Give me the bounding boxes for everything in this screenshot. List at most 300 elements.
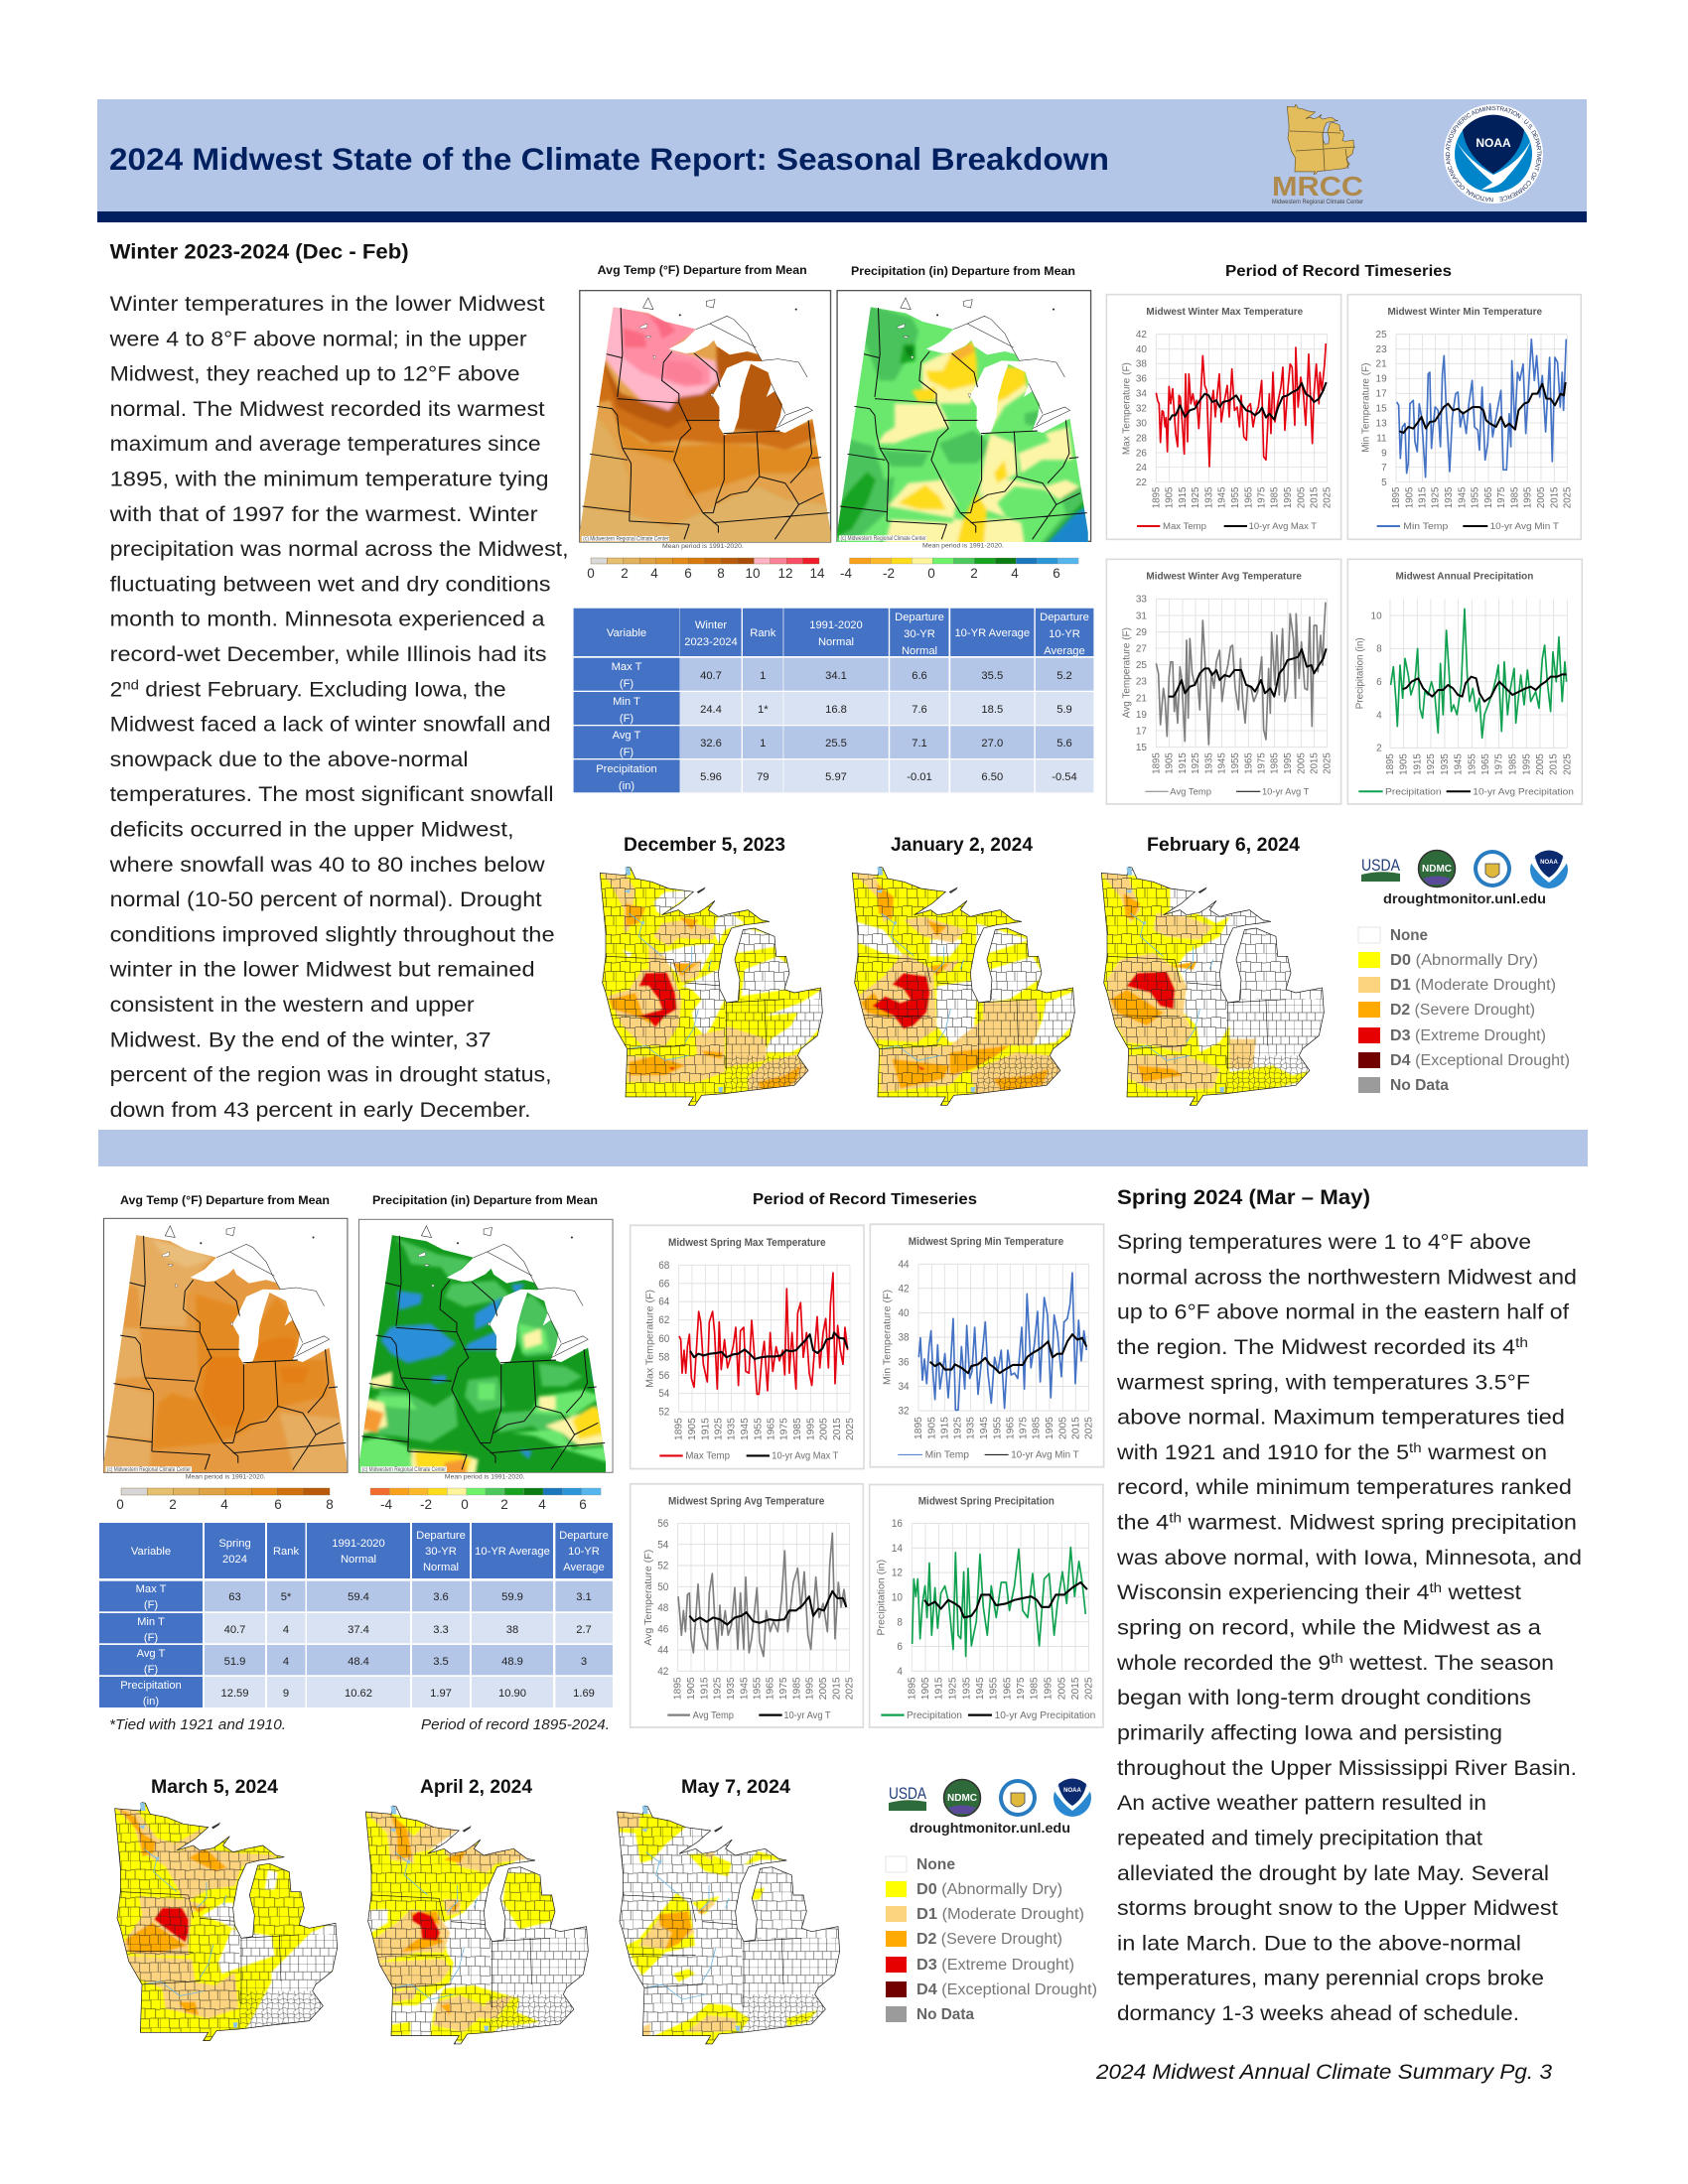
table: winter statistics: Precipitation [596, 763, 657, 775]
chart: winter average temperature: 1965 [1243, 752, 1254, 774]
table: winter statistics [574, 609, 1093, 792]
text block: spring narrative: th [1331, 1650, 1343, 1666]
table: winter statistics: -0.54 [1052, 771, 1077, 783]
colorbar: winter precipitation: 0 [927, 566, 935, 581]
text block: winter narrative: record-wet December, while Illinois had its [110, 642, 547, 666]
chart: spring max temperature: 52 [658, 1407, 670, 1419]
chart: spring average temperature: 1945 [740, 1677, 750, 1700]
colorbar: winter temperature: 14 [809, 566, 825, 581]
chart: spring precipitation: 1985 [1030, 1677, 1041, 1700]
table: winter statistics: 18.5 [981, 704, 1003, 716]
chart: spring average temperature: 1905 [686, 1677, 697, 1700]
table: spring statistics: 10-YR Average [475, 1546, 550, 1558]
date heading: February: February 6, 2024 [1147, 835, 1300, 856]
chart: spring average temperature: 10-yr Avg T [783, 1710, 831, 1721]
chart: winter precipitation: Precipitation (in) [1354, 637, 1365, 709]
chart: spring average temperature: 2025 [845, 1677, 856, 1700]
table: winter statistics: 35.5 [981, 670, 1003, 682]
date heading: January: January 2, 2024 [891, 835, 1033, 856]
chart: spring average temperature: 1995 [805, 1677, 816, 1700]
chart: spring average temperature: 2005 [818, 1677, 829, 1700]
chart: winter average temperature: 27 [1136, 643, 1147, 654]
chart: winter min temperature: 2025 [1562, 487, 1573, 508]
text block: spring narrative: Spring temperatures were 1 to 4°F above [1117, 1230, 1531, 1254]
chart: winter average temperature: 1945 [1217, 752, 1228, 774]
chart: winter min temperature: 1915 [1418, 487, 1429, 508]
chart: winter precipitation: 1925 [1426, 753, 1437, 775]
chart: spring average temperature [631, 1484, 863, 1727]
chart: spring precipitation: 1935 [962, 1677, 972, 1700]
table: winter statistics: Winter [695, 619, 727, 631]
text block: winter narrative: fluctuating between wet and dry conditions [110, 572, 551, 596]
table: spring statistics: Departure [416, 1530, 466, 1542]
chart: spring max temperature: 1905 [687, 1418, 698, 1440]
chart: spring min temperature: 34 [899, 1382, 910, 1393]
map: spring precipitation departure [353, 1219, 620, 1480]
map title: winter precipitation: Precipitation (in) Departure from Mean [851, 264, 1075, 278]
text block: winter narrative: driest February. Excluding Iowa, the [139, 677, 506, 701]
chart: winter max temperature: 1925 [1191, 487, 1201, 508]
chart: spring min temperature: Min Temp [925, 1449, 969, 1461]
chart: spring min temperature: 40 [899, 1308, 910, 1319]
icon: NDMC logo [1418, 850, 1456, 887]
chart: spring precipitation: 4 [897, 1667, 903, 1678]
drought legend: spring: D3 (Extreme Drought) [916, 1957, 1074, 1974]
table: spring statistics: Departure [559, 1530, 609, 1542]
chart: winter max temperature: 38 [1136, 359, 1147, 370]
icon: USDA logo [1361, 857, 1400, 882]
text block: winter narrative: 2 [110, 677, 122, 701]
table: spring statistics: Variable [131, 1546, 171, 1558]
chart: winter max temperature: Max Temp [1163, 521, 1206, 531]
chart: spring min temperature: 42 [899, 1284, 910, 1295]
table: spring statistics: Average [563, 1562, 605, 1573]
chart: winter max temperature: 1945 [1217, 487, 1228, 508]
map: winter precipitation departure: Mean period is 1991-2020. [922, 543, 1004, 550]
colorbar: winter temperature [587, 558, 825, 581]
chart: winter precipitation: 1935 [1440, 753, 1451, 775]
chart: spring min temperature: 10-yr Avg Min T [1011, 1449, 1079, 1461]
drought legend: winter: D3 (Extreme Drought) [1390, 1027, 1546, 1044]
chart: winter min temperature: 1985 [1509, 487, 1520, 508]
text block: winter narrative: Midwest. By the end of the winter, 37 [110, 1027, 492, 1051]
table: spring statistics: 9 [283, 1688, 289, 1700]
text block: spring narrative: primarily affecting Iowa and persisting [1117, 1721, 1502, 1745]
chart: spring average temperature: 54 [657, 1540, 669, 1551]
table: spring statistics: 2024 [222, 1554, 247, 1566]
colorbar: spring temperature: 4 [220, 1497, 228, 1512]
chart: winter average temperature: 1915 [1178, 752, 1189, 774]
chart: spring precipitation: 6 [897, 1642, 903, 1653]
table: spring statistics: Rank [273, 1546, 299, 1558]
chart: spring precipitation: Midwest Spring Precipitation [918, 1496, 1055, 1507]
text block: spring narrative: warmest on [1422, 1440, 1547, 1464]
colorbar: spring precipitation: 6 [579, 1497, 587, 1512]
text block: spring narrative: with 1921 and 1910 for the 5 [1117, 1440, 1388, 1464]
chart: spring precipitation: 1995 [1044, 1677, 1055, 1700]
chart: spring max temperature: 64 [658, 1297, 670, 1308]
text block: spring narrative: whole recorded the 9 [1117, 1651, 1317, 1675]
text block: spring narrative: th [1515, 1334, 1528, 1350]
chart: winter average temperature: Avg Temperature (F) [1121, 627, 1132, 718]
chart: spring precipitation: 1975 [1016, 1677, 1027, 1700]
chart: winter precipitation: 10 [1371, 611, 1382, 621]
chart: spring precipitation: 10-yr Avg Precipitation [995, 1710, 1095, 1721]
chart: winter max temperature: 1985 [1270, 487, 1281, 508]
map: winter precipitation departure: (c) Midwestern Regional Climate Center [841, 535, 926, 542]
chart: spring max temperature: 56 [658, 1371, 670, 1382]
text block: spring narrative: the region. The Midwest recorded its 4 [1117, 1335, 1479, 1359]
date heading: April: April 2, 2024 [420, 1777, 532, 1798]
drought legend: spring [886, 1779, 1097, 2023]
colorbar: spring temperature: 8 [326, 1497, 334, 1512]
chart: spring precipitation: 1905 [920, 1677, 931, 1700]
table: spring statistics: 4 [283, 1656, 289, 1668]
text block: spring narrative: warmest. Midwest spring precipitation [1182, 1511, 1577, 1535]
text block: winter narrative: were 4 to 8°F above normal; in the upper [109, 327, 527, 350]
table: winter statistics: 6.6 [912, 670, 927, 682]
table: winter statistics: 5.97 [825, 771, 847, 783]
table: winter statistics: Departure [1040, 612, 1089, 623]
chart: spring max temperature: Max Temp [685, 1450, 730, 1462]
chart: winter average temperature: 19 [1136, 710, 1147, 721]
map: winter precipitation departure [829, 291, 1096, 550]
table: spring statistics: (F) [144, 1599, 158, 1611]
text block: spring narrative: spring on record, while the Midwest as a [1117, 1616, 1541, 1640]
chart: winter min temperature: 5 [1381, 478, 1387, 488]
chart: spring precipitation: 1925 [948, 1677, 958, 1700]
text block: spring narrative: alleviated the drought by late May. Several [1117, 1861, 1549, 1885]
chart: spring precipitation [870, 1484, 1103, 1727]
text block: winter narrative [108, 292, 569, 1122]
map: winter temperature departure: (c) Midwestern Regional Climate Center [583, 536, 669, 543]
table: spring statistics: Normal [423, 1562, 459, 1573]
chart: spring average temperature: 42 [657, 1667, 669, 1678]
chart: winter min temperature [1347, 295, 1581, 539]
chart: winter precipitation: Midwest Annual Precipitation [1396, 571, 1533, 582]
table: spring statistics: (F) [144, 1664, 158, 1676]
chart: winter max temperature: 1975 [1256, 487, 1267, 508]
chart: winter min temperature: 25 [1376, 330, 1387, 341]
drought legend: winter: D0 (Abnormally Dry) [1390, 952, 1538, 969]
chart: winter average temperature: 21 [1136, 693, 1147, 704]
chart: spring max temperature: 1925 [714, 1418, 724, 1440]
table: winter statistics: 1* [758, 704, 769, 716]
chart: spring min temperature: 1985 [1032, 1417, 1043, 1439]
drought legend: spring: D4 (Exceptional Drought) [916, 1981, 1097, 1998]
chart: winter min temperature: 1905 [1404, 487, 1415, 508]
text block: spring narrative: wettest. The season [1343, 1651, 1554, 1675]
chart: spring min temperature: 32 [899, 1406, 910, 1418]
icon: NOAA small logo [1054, 1779, 1091, 1817]
chart: winter precipitation: 2005 [1535, 753, 1546, 775]
table: spring statistics: 40.7 [224, 1624, 245, 1636]
text block: winter narrative: maximum and average temperatures since [110, 432, 541, 456]
text block: spring narrative: th [1429, 1579, 1442, 1595]
icon: NDMC logo [943, 1779, 981, 1817]
table: spring statistics: 10.90 [498, 1688, 526, 1700]
table: spring statistics: 3.1 [576, 1591, 592, 1603]
drought legend: winter: No Data [1390, 1077, 1449, 1094]
chart: winter max temperature: 1915 [1178, 487, 1189, 508]
chart: winter max temperature: 36 [1136, 374, 1147, 385]
table: winter statistics: Avg T [613, 730, 641, 742]
drought legend: winter: None [1390, 927, 1428, 944]
chart: winter precipitation: 4 [1376, 710, 1382, 721]
map title: spring temperature: Avg Temp (°F) Departure from Mean [120, 1193, 330, 1207]
map title: winter temperature: Avg Temp (°F) Departure from Mean [598, 263, 807, 277]
table: winter statistics: Normal [902, 645, 937, 657]
chart: winter min temperature: 1975 [1496, 487, 1507, 508]
chart: winter precipitation: 2 [1376, 744, 1382, 754]
chart: spring min temperature: 1945 [979, 1417, 990, 1439]
heading: spring: Spring 2024 (Mar – May) [1117, 1186, 1370, 1209]
drought legend: spring: D0 (Abnormally Dry) [916, 1881, 1062, 1898]
table: winter statistics: 1 [760, 738, 766, 750]
table: winter statistics: Normal [818, 636, 854, 648]
chart: spring average temperature: 1965 [766, 1677, 776, 1700]
table: winter statistics: 5.6 [1056, 738, 1072, 750]
chart: spring max temperature: 54 [658, 1389, 670, 1400]
text block: winter narrative: normal (10-50 percent of normal). Drought [110, 887, 542, 911]
table: spring statistics: Normal [341, 1554, 376, 1566]
chart: winter average temperature: 2015 [1310, 752, 1321, 774]
table: winter statistics: 1 [760, 670, 766, 682]
text block: winter narrative: temperatures. The most significant snowfall [110, 782, 554, 806]
table: spring statistics: 51.9 [224, 1656, 245, 1668]
table: spring statistics: 3 [581, 1656, 587, 1668]
drought map: December 5, 2023 [600, 866, 823, 1106]
chart: winter min temperature: 1895 [1391, 487, 1402, 508]
chart: spring min temperature: 1965 [1006, 1417, 1016, 1439]
table: winter statistics: Max T [612, 661, 642, 673]
chart: spring precipitation: Precipitation [907, 1710, 962, 1721]
table: winter statistics: 6.50 [981, 771, 1003, 783]
chart: winter average temperature: 2025 [1323, 752, 1334, 774]
chart: spring max temperature: 2015 [832, 1418, 843, 1440]
chart: winter min temperature: 21 [1376, 359, 1387, 370]
chart: winter average temperature: 1975 [1256, 752, 1267, 774]
table: winter statistics: 30-YR [904, 628, 935, 640]
table: winter statistics: Departure [895, 612, 944, 623]
chart: spring max temperature: 2025 [845, 1418, 856, 1440]
table: spring statistics: Precipitation [120, 1680, 182, 1692]
chart: winter precipitation: Precipitation [1385, 787, 1442, 797]
chart: winter min temperature: Min Temp [1403, 521, 1448, 531]
map title: spring precipitation: Precipitation (in) Departure from Mean [372, 1193, 598, 1207]
chart: spring max temperature [631, 1225, 864, 1469]
chart: spring average temperature: 48 [657, 1603, 669, 1614]
chart: spring min temperature: 1975 [1019, 1417, 1030, 1439]
table: spring statistics: 1.69 [573, 1688, 595, 1700]
table: winter statistics: 32.6 [700, 738, 722, 750]
table: spring statistics: Min T [137, 1616, 165, 1628]
text block: spring narrative: temperatures, many perennial crops broke [1117, 1967, 1544, 1990]
text block: winter narrative: deficits occurred in the upper Midwest, [110, 818, 514, 842]
chart: spring precipitation: 1915 [934, 1677, 945, 1700]
table: winter statistics: 5.9 [1056, 704, 1072, 716]
icon: Department of Commerce seal [999, 1779, 1037, 1817]
chart: winter average temperature: 23 [1136, 677, 1147, 688]
table: winter statistics: Variable [607, 627, 646, 639]
chart: winter max temperature: 1965 [1243, 487, 1254, 508]
text block: spring narrative: wettest [1442, 1580, 1521, 1604]
chart: winter max temperature [1106, 295, 1341, 539]
table: winter statistics: (in) [619, 780, 634, 792]
chart: winter max temperature: 22 [1136, 478, 1147, 488]
table: winter statistics: Min T [613, 696, 640, 708]
chart: winter precipitation: 10-yr Avg Precipitation [1473, 787, 1574, 797]
table: spring statistics: 2.7 [576, 1624, 592, 1636]
table: winter statistics: 2023-2024 [684, 636, 738, 648]
chart: winter precipitation: 1995 [1521, 753, 1532, 775]
chart: spring min temperature: 38 [899, 1332, 910, 1344]
chart: winter max temperature: 2025 [1323, 487, 1334, 508]
chart: winter min temperature: Min Temperature (F) [1360, 363, 1371, 453]
chart: spring average temperature: 1915 [700, 1677, 710, 1700]
table: winter statistics: Rank [750, 627, 776, 639]
chart: spring precipitation: 1895 [908, 1677, 917, 1700]
text block: spring narrative: the 4 [1117, 1511, 1165, 1535]
colorbar: spring precipitation: 4 [538, 1497, 546, 1512]
chart: spring min temperature: 1925 [953, 1417, 964, 1439]
chart: spring average temperature: 56 [657, 1519, 669, 1530]
chart: winter min temperature: 2015 [1549, 487, 1560, 508]
chart: winter precipitation: 1985 [1507, 753, 1518, 775]
text block: winter narrative: snowpack due to the above-normal [110, 748, 469, 771]
map: spring precipitation departure: (c) Midwestern Regional Climate Center [362, 1466, 446, 1473]
chart: spring precipitation: 2015 [1070, 1677, 1081, 1700]
icon: NOAA logo: NOAA [1476, 136, 1511, 150]
text block: winter narrative: month to month. Minnesota experienced a [110, 608, 545, 631]
text block: spring narrative: throughout the Upper Mississippi River Basin. [1117, 1756, 1577, 1780]
table: winter statistics: 34.1 [825, 670, 847, 682]
chart: spring average temperature: 1955 [753, 1677, 763, 1700]
chart: winter max temperature: 34 [1136, 389, 1147, 400]
chart: spring average temperature: 52 [657, 1561, 669, 1572]
icon: Department of Commerce seal [1474, 850, 1511, 887]
table: winter statistics: Average [1044, 645, 1085, 657]
chart: spring max temperature: 1965 [767, 1418, 777, 1440]
drought legend: winter: D1 (Moderate Drought) [1390, 977, 1556, 994]
map: spring precipitation departure: Mean period is 1991-2020. [445, 1473, 525, 1480]
chart: winter min temperature: 13 [1376, 418, 1387, 429]
chart: spring average temperature: Avg Temp [693, 1710, 734, 1721]
chart: spring min temperature: 1915 [940, 1417, 950, 1439]
colorbar: winter temperature: 8 [717, 566, 725, 581]
map: winter temperature departure [573, 291, 836, 550]
table: spring statistics: 38 [506, 1624, 518, 1636]
text block: winter narrative: Midwest faced a lack of winter snowfall and [110, 713, 551, 737]
heading: winter: Winter 2023-2024 (Dec - Feb) [110, 240, 409, 264]
icon: MRCC logo: MRCC [1272, 171, 1363, 202]
table: spring statistics: 12.59 [220, 1688, 248, 1700]
text block: spring narrative: th [1169, 1510, 1182, 1526]
table: spring statistics: 4 [283, 1624, 289, 1636]
table: spring statistics: 3.5 [433, 1656, 449, 1668]
text block: spring narrative: above normal. Maximum temperatures tied [1117, 1406, 1565, 1430]
chart: spring max temperature: 1895 [674, 1418, 685, 1440]
header banner [97, 99, 1587, 222]
table: spring statistics: 10-YR [568, 1546, 600, 1558]
icon: USDA logo: USDA [1361, 857, 1400, 875]
icon: NOAA small logo [1530, 850, 1568, 888]
chart: spring average temperature: Midwest Spring Avg Temperature [668, 1496, 825, 1507]
drought map: April 2, 2024 [365, 1805, 589, 2045]
table: winter statistics: 16.8 [825, 704, 847, 716]
chart: winter precipitation: 2025 [1562, 753, 1573, 775]
chart: spring precipitation: 16 [892, 1519, 903, 1530]
table: spring statistics: 3.3 [433, 1624, 449, 1636]
text block: spring narrative: record, while minimum temperatures ranked [1117, 1475, 1572, 1499]
chart: winter average temperature: 1985 [1270, 752, 1281, 774]
chart: spring max temperature: 2005 [819, 1418, 830, 1440]
chart: spring average temperature: 2015 [832, 1677, 842, 1700]
icon: NOAA logo: NATIONAL OCEANIC AND ATMOSPHERIC ADMINISTRATION · U.S. DEPARTMENT OF COMMERCE [1446, 105, 1541, 203]
table: winter statistics: 7.6 [912, 704, 927, 716]
chart: spring min temperature: 36 [899, 1357, 910, 1368]
text block: spring narrative [1116, 1230, 1582, 2025]
icon: USDA logo [889, 1785, 926, 1811]
table: spring statistics: Spring [218, 1538, 251, 1550]
chart: winter min temperature: 11 [1376, 433, 1387, 444]
chart: spring precipitation: 1945 [975, 1677, 986, 1700]
icon: NDMC logo: NDMC [1422, 864, 1452, 875]
chart: spring max temperature: 1915 [701, 1418, 711, 1440]
table: spring statistics: 5* [281, 1591, 292, 1603]
drought map: May 7, 2024 [617, 1805, 840, 2045]
table footnote: period of record: Period of record 1895-2024. [421, 1717, 610, 1733]
chart: spring average temperature: 44 [657, 1645, 669, 1657]
chart: spring max temperature: 58 [658, 1352, 670, 1363]
chart: winter min temperature: 17 [1376, 389, 1387, 400]
chart: winter precipitation: 6 [1376, 677, 1382, 688]
chart: winter max temperature: 1905 [1165, 487, 1176, 508]
chart: winter max temperature: 32 [1136, 404, 1147, 415]
text block: spring narrative: th [1409, 1439, 1422, 1455]
chart: spring average temperature: Avg Temperature (F) [643, 1550, 654, 1646]
table: winter statistics: 25.5 [825, 738, 847, 750]
table: spring statistics: Max T [136, 1583, 167, 1595]
text block: winter narrative: down from 43 percent in early December. [110, 1098, 531, 1122]
colorbar: spring precipitation: 2 [500, 1497, 508, 1512]
chart: winter average temperature: 10-yr Avg T [1262, 787, 1310, 797]
chart: spring average temperature: 46 [657, 1624, 669, 1635]
chart: winter min temperature: 1995 [1523, 487, 1534, 508]
chart: winter average temperature: 25 [1136, 660, 1147, 671]
chart: winter precipitation [1347, 559, 1582, 804]
chart: winter average temperature: Avg Temp [1170, 787, 1211, 797]
text block: winter narrative: 1895, with the minimum temperature tying [110, 467, 549, 490]
table: winter statistics: 10-YR Average [954, 627, 1030, 639]
colorbar: spring precipitation [370, 1488, 601, 1512]
chart: winter max temperature: Midwest Winter Max Temperature [1146, 307, 1304, 318]
chart: winter average temperature [1106, 559, 1341, 804]
chart: winter max temperature: 42 [1136, 330, 1147, 341]
chart: winter min temperature: 2005 [1536, 487, 1547, 508]
chart: winter max temperature: 1895 [1151, 487, 1162, 508]
table: winter statistics: 27.0 [981, 738, 1003, 750]
table: winter statistics: (F) [620, 678, 633, 690]
table: spring statistics: 59.4 [348, 1591, 369, 1603]
drought legend: spring: None [916, 1856, 955, 1873]
chart: winter precipitation: 1915 [1412, 753, 1423, 775]
text block: spring narrative: up to 6°F above normal in the eastern half of [1117, 1300, 1569, 1324]
chart: spring average temperature: 1935 [726, 1677, 737, 1700]
chart: spring max temperature: 1955 [754, 1418, 764, 1440]
chart: spring precipitation: 2005 [1057, 1677, 1067, 1700]
chart: spring precipitation: 1955 [989, 1677, 1000, 1700]
